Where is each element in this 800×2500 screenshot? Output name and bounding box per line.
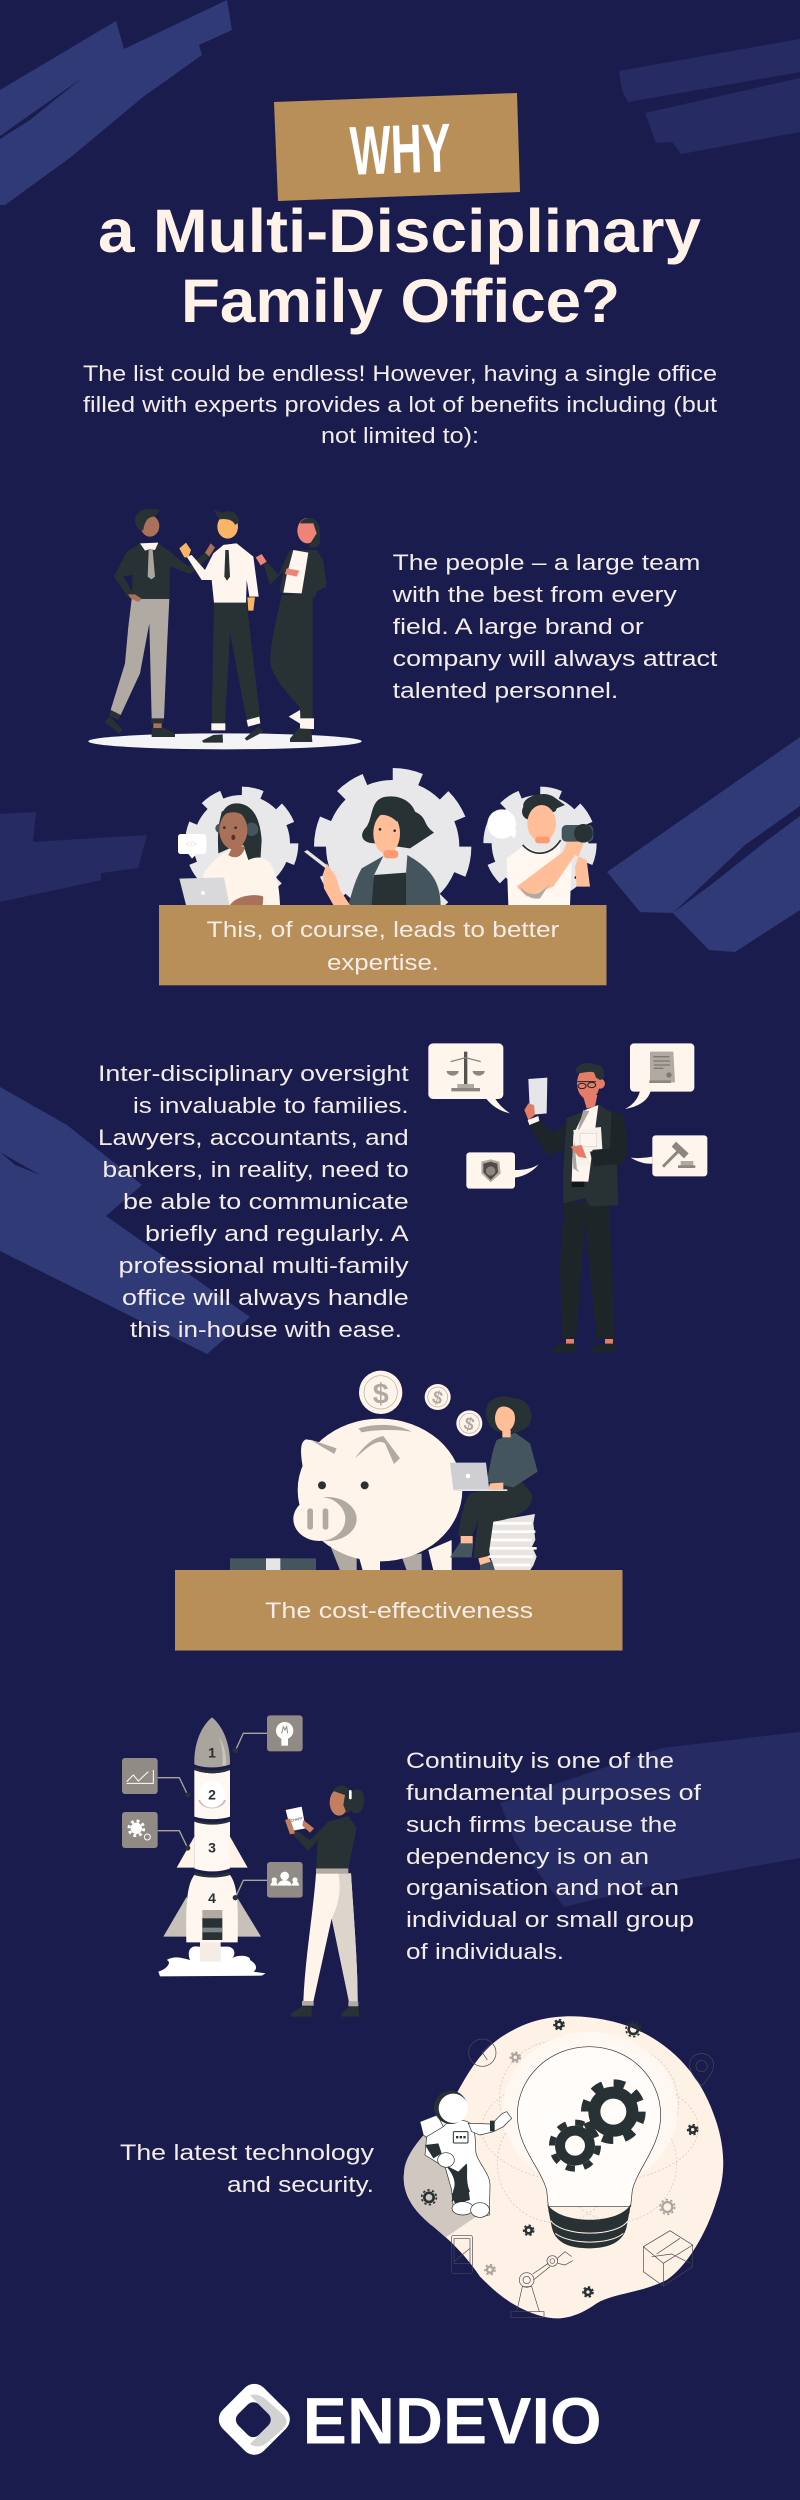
callout: better expertise [159, 905, 606, 985]
illustration: light bulb with gears and astronaut [404, 2016, 723, 2318]
callout: the cost-effectiveness: The cost-effectiveness [265, 1598, 533, 1623]
text block: continuity [406, 1748, 702, 1964]
heading tag: WHY: WHY [349, 109, 452, 190]
heading tag: WHY [274, 93, 520, 201]
icon: logo mark [213, 2378, 295, 2460]
illustration: piggy bank, coins and woman with laptop: $ [462, 1413, 477, 1435]
text block: inter-disciplinary oversight: Inter-disciplinary oversight [98, 1061, 409, 1086]
illustration: rocket with four stages and woman holding chart: 3 [208, 1840, 216, 1856]
text block: the people: with the best from every [391, 582, 677, 607]
illustration: rocket with four stages and woman holding chart: 2 [208, 1787, 216, 1803]
text block: the people: The people – a large team [393, 550, 700, 575]
illustration: three professionals with gears [178, 774, 593, 919]
text block: inter-disciplinary oversight: professional multi-family [118, 1253, 409, 1278]
illustration: rocket with four stages and woman holding chart [122, 1715, 364, 2017]
intro text: not limited to): [321, 423, 479, 448]
text block: continuity: of individuals. [406, 1939, 564, 1964]
text block: inter-disciplinary oversight: Lawyers, accountants, and [98, 1125, 409, 1150]
text block: the people [391, 550, 717, 703]
title: a Multi-Disciplinary [98, 197, 701, 265]
text block: continuity: fundamental purposes of [406, 1780, 702, 1805]
title [98, 197, 701, 335]
text block: continuity: such firms because the [406, 1812, 677, 1837]
callout: better expertise: This, of course, leads to better [207, 917, 559, 942]
illustration: three colleagues on white spotlight [88, 509, 362, 749]
illustration: three professionals with gears: </> [186, 840, 198, 849]
text block: inter-disciplinary oversight [98, 1061, 409, 1342]
callout: better expertise: expertise. [327, 950, 439, 975]
illustration: rocket with four stages and woman holding chart: 1 [208, 1745, 216, 1761]
text block: continuity: Continuity is one of the [406, 1748, 674, 1773]
title: Family Office? [181, 267, 620, 335]
intro text: The list could be endless! However, having a single office [83, 361, 717, 386]
text block: continuity: dependency is on an [406, 1844, 649, 1869]
intro text [83, 361, 717, 448]
intro text: filled with experts provides a lot of benefits including (but [83, 392, 717, 417]
text block: latest technology: and security. [227, 2172, 374, 2197]
text block: latest technology: The latest technology [120, 2140, 374, 2165]
text block: the people: field. A large brand or [393, 614, 644, 639]
illustration: rocket with four stages and woman holding chart: 4 [208, 1890, 216, 1906]
callout: the cost-effectiveness [175, 1570, 622, 1650]
text block: inter-disciplinary oversight: briefly and regularly. A [145, 1221, 409, 1246]
text block: the people: company will always attract [393, 646, 717, 671]
illustration: piggy bank, coins and woman with laptop [230, 1371, 538, 1570]
text block: continuity: individual or small group [406, 1907, 694, 1932]
text block: the people: talented personnel. [393, 678, 618, 703]
logo: Endevio: ENDEVIO [303, 2383, 602, 2457]
text block: inter-disciplinary oversight: bankers, in reality, need to [102, 1157, 409, 1182]
text block: inter-disciplinary oversight: this in-house with ease. [130, 1317, 402, 1342]
illustration: lawyer with speech bubbles [428, 1043, 707, 1352]
text block: inter-disciplinary oversight: office will always handle [122, 1285, 409, 1310]
text block: latest technology [120, 2140, 374, 2197]
text block: inter-disciplinary oversight: is invaluable to families. [133, 1093, 409, 1118]
logo: Endevio [213, 2378, 602, 2460]
text block: inter-disciplinary oversight: be able to communicate [123, 1189, 409, 1214]
illustration: rocket with four stages and woman holding chart: CHART [290, 1816, 304, 1823]
illustration: piggy bank, coins and woman with laptop: $ [430, 1387, 445, 1409]
illustration: piggy bank, coins and woman with laptop: $ [373, 1378, 389, 1410]
text block: continuity: organisation and not an [406, 1875, 679, 1900]
